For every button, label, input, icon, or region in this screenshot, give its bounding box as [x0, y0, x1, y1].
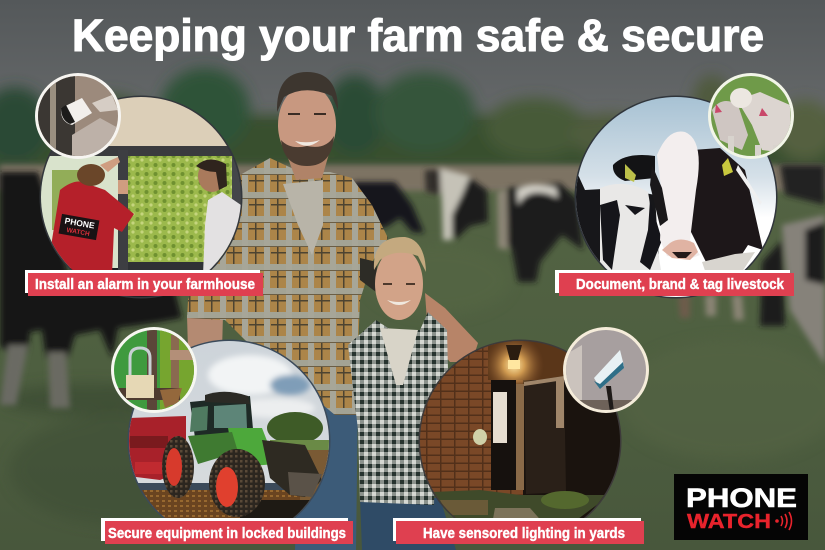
tractor cab	[190, 396, 253, 436]
circle photo: tractor	[128, 340, 330, 518]
label: secure equipment	[101, 518, 353, 544]
logo: Phone Watch: PHONE	[686, 483, 797, 513]
circle photo: alarm installation	[40, 96, 244, 300]
label: install an alarm	[25, 270, 263, 296]
label: document, brand and tag	[555, 270, 794, 296]
boy: t-shirt	[380, 328, 418, 385]
circle photo: cows	[570, 95, 782, 300]
tree line	[0, 68, 825, 170]
label: sensored lighting	[393, 518, 644, 544]
man: left forearm	[187, 315, 223, 350]
red trailer	[128, 416, 186, 480]
man: hair	[277, 72, 338, 112]
inset circle: lambs	[707, 72, 795, 160]
man: eyes	[288, 113, 326, 115]
man: shirt	[187, 158, 388, 415]
dark cow centre	[505, 183, 583, 282]
man: smile	[295, 140, 320, 146]
boy: shirt	[348, 312, 448, 505]
worker in red jacket	[50, 182, 134, 275]
jacket logo: WATCH	[66, 227, 90, 238]
label: sensored lighting: Have sensored lighting in yards	[423, 526, 625, 542]
big dark cow left	[0, 172, 182, 358]
man: jeans	[295, 395, 358, 550]
man: dark sleeve fold	[360, 258, 377, 292]
man: neck	[285, 150, 330, 180]
title: Keeping your farm safe & secure	[72, 10, 764, 61]
boy: eyes	[383, 283, 415, 285]
label: install an alarm: Install an alarm in your farmhouse	[35, 277, 255, 293]
jacket logo: PHONE	[64, 216, 96, 231]
boy: face	[375, 248, 423, 320]
front loader	[262, 440, 322, 497]
boy: jeans	[360, 498, 456, 550]
logo: signal icon	[775, 512, 792, 530]
right cow	[780, 165, 825, 205]
front wheel	[209, 449, 265, 517]
spotted cow	[450, 177, 488, 240]
inset circle: floodlight	[562, 326, 650, 414]
jacket logo	[59, 214, 99, 240]
man: beard	[281, 136, 334, 166]
black cow near man	[353, 182, 424, 233]
boy in check shirt	[348, 237, 456, 550]
logo: Phone Watch: WATCH	[687, 511, 771, 533]
inset circle: outdoor alarm camera	[35, 72, 122, 160]
homeowner in white shirt	[203, 192, 241, 275]
man: t-shirt	[283, 180, 323, 255]
boy: hair	[374, 237, 426, 272]
rear wheel	[162, 436, 194, 498]
man: arm around boy	[425, 293, 478, 362]
circle photo: sensored lighting	[418, 340, 622, 518]
man: face	[278, 85, 336, 165]
inset circle: padlock	[110, 326, 198, 414]
cows in the field	[0, 165, 825, 408]
pasture	[0, 188, 825, 550]
tractor bonnet	[228, 428, 268, 466]
boy: smile	[387, 300, 411, 305]
far field band	[0, 165, 825, 191]
logo: Phone Watch	[674, 474, 808, 540]
label: secure equipment: Secure equipment in locked buildings	[108, 526, 346, 542]
man in plaid shirt	[187, 72, 478, 550]
label: document, brand and tag: Document, brand & tag livestock	[576, 277, 785, 293]
